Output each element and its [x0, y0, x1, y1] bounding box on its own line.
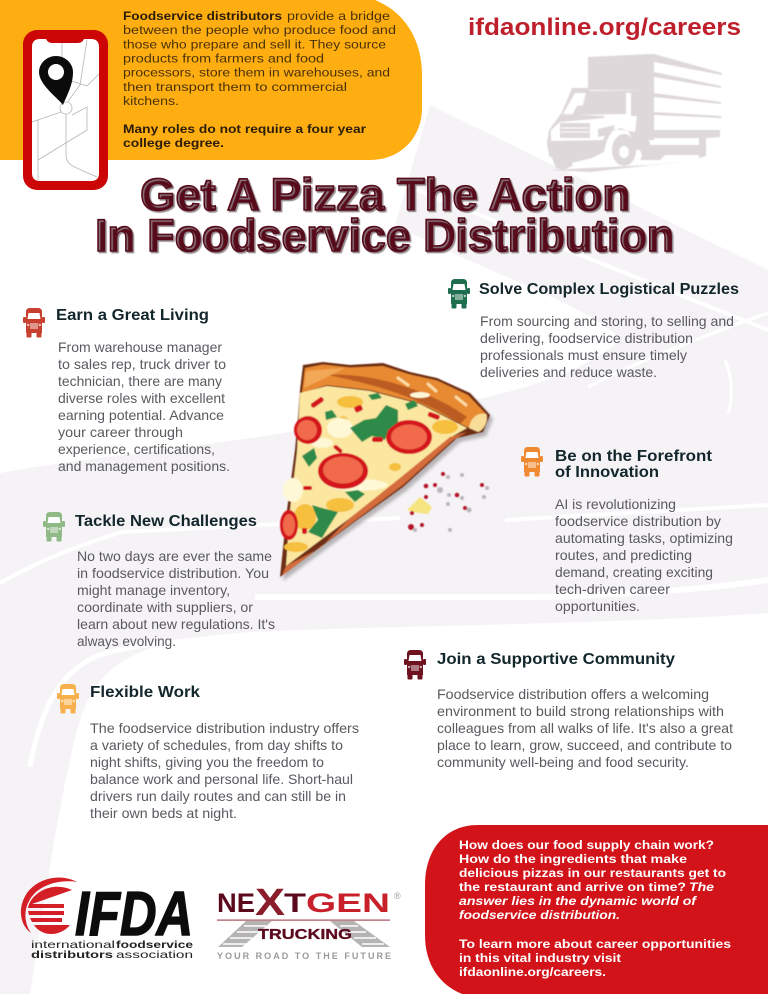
icon: truck [23, 308, 45, 338]
body text: The foodservice distribution industry offers [90, 720, 359, 736]
basil leaves [302, 393, 418, 538]
intro text [123, 9, 396, 150]
body text: AI is revolutionizing [555, 496, 676, 512]
call to action text: To learn more about career opportunities [459, 937, 731, 951]
wordmark: GEN [306, 888, 390, 918]
body text: place to learn, grow, succeed, and contribute to [437, 737, 732, 753]
body text: demand, creating exciting [555, 564, 713, 580]
cab roof, cab outline [547, 88, 650, 162]
intro text: Many roles do not require a four year [123, 122, 366, 136]
logo: IFDA [21, 878, 193, 961]
section: Solve Complex Logistical Puzzles [448, 279, 739, 380]
body text: deliveries and reduce waste. [480, 364, 657, 380]
logo tagline: foodservice [116, 939, 193, 951]
body text: night shifts, giving you the freedom to [90, 754, 324, 770]
logo tagline: association [116, 949, 193, 961]
side window [631, 92, 642, 116]
body text: a variety of schedules, from day shifts to [90, 737, 343, 753]
melted cheese blobs [284, 396, 458, 552]
section: Earn a Great Living [23, 307, 230, 474]
slice shadow [283, 366, 493, 581]
body text: routes, and predicting [555, 547, 692, 563]
call to action text: The [689, 880, 714, 894]
body text: drivers run daily routes and can still be in [90, 788, 346, 804]
intro text: then transport them to commercial [123, 80, 347, 94]
slice outline [280, 362, 490, 577]
intro text: college degree. [123, 136, 224, 150]
intro text: kitchens. [123, 94, 179, 108]
body text: opportunities. [555, 598, 640, 614]
section: Tackle New Challenges [43, 512, 275, 649]
body text: Foodservice distribution offers a welcoming [437, 686, 709, 702]
intro text: Foodservice distributors [123, 9, 282, 23]
body text: in foodservice distribution. You [77, 565, 269, 581]
body text: coordinate with suppliers, or [77, 599, 253, 615]
panel: intro [0, 0, 422, 160]
crust [302, 364, 487, 430]
logo: NextGen Trucking: YOUR ROAD TO THE FUTURE [217, 951, 391, 961]
intro text: those who prepare and sell it. They source [123, 38, 386, 52]
intro text: provide a bridge [287, 9, 390, 23]
heading: Join a Supportive Community [437, 651, 675, 668]
icon: truck [57, 684, 79, 714]
body text: earning potential. Advance [58, 407, 224, 423]
intro text: processors, store them in warehouses, and [123, 66, 390, 80]
ground shadow [548, 161, 690, 172]
wordmark: X [255, 882, 286, 924]
website url: ifdaonline.org/careers [468, 14, 741, 41]
body text: From warehouse manager [58, 339, 222, 355]
panel: call to action [425, 825, 768, 994]
wordmark: T [284, 888, 307, 918]
cargo box side slats [654, 54, 722, 75]
call to action text: delicious pizzas in our restaurants get to [459, 866, 727, 880]
body text: professionals must ensure timely [480, 347, 687, 363]
body text [480, 313, 734, 380]
body text: tech-driven career [555, 581, 670, 597]
cheese [286, 386, 467, 566]
body text [58, 339, 230, 474]
body text: delivering, foodservice distribution [480, 330, 693, 346]
cargo box front [588, 54, 654, 140]
body text: No two days are ever the same [77, 548, 272, 564]
call to action text: How does our food supply chain work? [459, 838, 714, 852]
rear wheel [612, 134, 636, 166]
body text: might manage inventory, [77, 582, 230, 598]
title: Get A Pizza The Action [140, 169, 630, 220]
body text: foodservice distribution by [555, 513, 721, 529]
logo: NextGen Trucking [217, 882, 401, 961]
section: Flexible Work [57, 684, 359, 821]
icon: truck [404, 650, 426, 680]
logo wordmark: IFDA [75, 880, 193, 949]
body text: colleagues from all walks of life. It's also a great [437, 720, 733, 736]
grille [560, 123, 590, 138]
title: In Foodservice Distribution [95, 210, 674, 261]
intro text: products from farmers and food [123, 52, 324, 66]
body text: always evolving. [77, 633, 176, 649]
icon: delivery truck [547, 54, 722, 172]
section: Be on the Forefront of Innovation [521, 447, 733, 614]
logo tagline: international [31, 939, 115, 951]
body text: environment to build strong relationships with [437, 703, 724, 719]
logo tagline [31, 939, 193, 961]
wordmark: NE [217, 888, 255, 918]
body text: and management positions. [58, 458, 230, 474]
icon: truck [43, 512, 65, 542]
title [95, 169, 674, 261]
heading: Be on the Forefront [555, 448, 712, 465]
call to action text: ifdaonline.org/careers. [459, 965, 606, 979]
body text [90, 720, 359, 821]
logo: NextGen Trucking: TRUCKING [258, 927, 352, 943]
icon: truck [521, 447, 543, 476]
call to action text: the restaurant and arrive on time? [459, 880, 686, 894]
body text [77, 548, 275, 649]
call to action text: answer lies in the dynamic world of [459, 894, 698, 908]
lower crust edge [283, 432, 467, 575]
call to action text [459, 838, 731, 979]
crumbs [407, 472, 489, 532]
heading [555, 448, 712, 481]
heading: of Innovation [555, 464, 659, 481]
call to action text: How do the ingredients that make [459, 852, 687, 866]
heading: Flexible Work [90, 684, 200, 701]
body text: their own beds at night. [90, 805, 237, 821]
logo tagline: distributors [31, 949, 113, 961]
body text: community well-being and food security. [437, 754, 689, 770]
icon: phone with map pin [23, 30, 108, 190]
tyre tracks [218, 921, 390, 947]
illustration: pizza slice [280, 362, 493, 581]
body text: balance work and personal life. Short-haul [90, 771, 353, 787]
cab white body [551, 118, 608, 141]
tomatoes [280, 416, 432, 540]
wordmark [217, 882, 390, 924]
body text: to sales rep, truck driver to [58, 356, 226, 372]
logo: NextGen Trucking: ® [394, 891, 401, 901]
body text: learn about new regulations. It's [77, 616, 275, 632]
body text: your career through [58, 424, 183, 440]
front wheel [552, 158, 574, 170]
call to action text: in this vital industry visit [459, 951, 621, 965]
windshield [572, 91, 626, 115]
body text: technician, there are many [58, 373, 222, 389]
logo mark [21, 878, 77, 934]
heading: Solve Complex Logistical Puzzles [479, 281, 739, 298]
body text: experience, certifications, [58, 441, 215, 457]
pepper bits [302, 396, 440, 534]
heading: Earn a Great Living [56, 307, 209, 324]
call to action text: foodservice distribution. [459, 908, 620, 922]
heading: Tackle New Challenges [75, 513, 257, 530]
body text [555, 496, 733, 614]
icon: truck [448, 279, 470, 308]
body text: diverse roles with excellent [58, 390, 225, 406]
intro text: between the people who produce food and [123, 23, 396, 37]
body text [437, 686, 733, 770]
body text: From sourcing and storing, to selling and [480, 313, 734, 329]
section: Join a Supportive Community [404, 650, 733, 770]
body text: automating tasks, optimizing [555, 530, 733, 546]
